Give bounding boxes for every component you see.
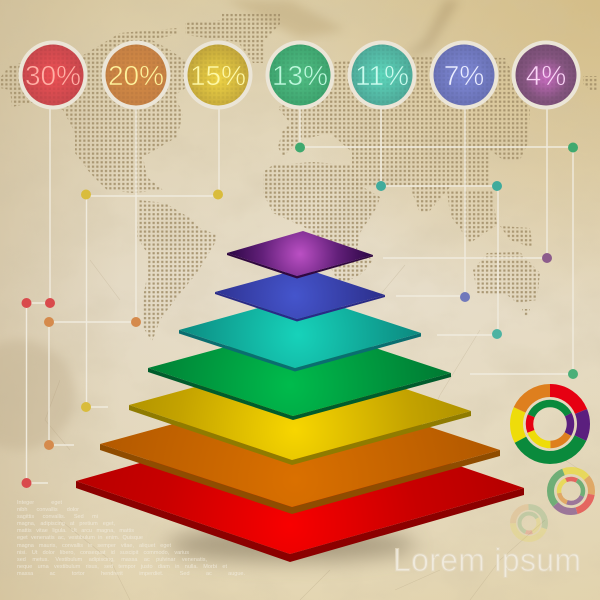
connector: 11% teal: [376, 108, 502, 339]
text block: body copy: nisi. Ut dolor libero, consequat id suscipit commodo, varius: [17, 550, 189, 556]
connector: 30% red: [22, 108, 55, 488]
bubble: 7%: [430, 40, 498, 110]
pyramid ground shadow: [165, 528, 415, 562]
text block: body copy: magna mauris, convallis in semper vitae, aliquet eget: [17, 543, 171, 549]
donut chart: small faded: [513, 507, 545, 539]
bubble: 15%: [184, 40, 252, 110]
bubble: 13%: 13%: [272, 60, 328, 91]
text block: body copy: nibh convallis dolor: [17, 507, 79, 513]
text block: body copy: magna, adipiscing at pretium eget,: [17, 521, 115, 527]
donut chart: medium: [550, 470, 592, 512]
dotted world map: [0, 13, 597, 342]
pyramid: stacked layers: [76, 231, 524, 562]
layer: yellow: [129, 356, 471, 465]
bubble: 20%: 20%: [108, 60, 164, 91]
layer: blue: [215, 268, 385, 322]
bubble: 11%: 11%: [355, 60, 409, 91]
bubble: 11%: [348, 40, 416, 110]
layer: green: [148, 325, 451, 420]
connector: 7% blue: [396, 108, 470, 302]
bubble: 4%: 4%: [526, 60, 566, 91]
bubble: 30%: [18, 40, 88, 110]
layer: purple: [227, 231, 373, 278]
connector: 20% orange: [44, 108, 141, 450]
heading: Lorem ipsum: Lorem ipsum: [393, 542, 581, 578]
bubble: 15%: 15%: [190, 60, 246, 91]
text block: body copy: neque urna vestibulum risus, sed tempor justo diam in nulla. Morbi et: [17, 564, 227, 570]
layer: teal: [179, 295, 421, 372]
text block: body copy: massa ac tortor hendrerit imperdiet. Sed ac augue.: [17, 571, 245, 577]
text block: body copy: Integer eget: [17, 500, 62, 506]
text block: body copy: mattis vitae ligula. Ut arcu magna, mattis: [17, 528, 134, 534]
bubble: 13%: [266, 40, 334, 110]
donut chart: large: [516, 390, 584, 458]
connector: 13% green: [295, 108, 578, 379]
text block: body copy: [17, 500, 245, 577]
connector: 15% yellow: [81, 108, 223, 412]
bubble: 7%: 7%: [444, 60, 484, 91]
bubble: 20%: [102, 40, 170, 110]
bubble: 4%: [512, 40, 580, 110]
layer: red: [76, 415, 524, 562]
text block: body copy: sagittis convallis. Sed mi: [17, 514, 98, 520]
bubble: 30%: 30%: [25, 60, 81, 91]
text block: body copy: sed metus. Vestibulum adipiscing, massa ac pulvinar venenatis,: [17, 557, 207, 563]
text block: body copy: eget venenatis ac, vestibulum in enim. Quisque: [17, 535, 143, 541]
connector: 4% purple: [383, 108, 552, 263]
layer: orange: [100, 387, 500, 514]
